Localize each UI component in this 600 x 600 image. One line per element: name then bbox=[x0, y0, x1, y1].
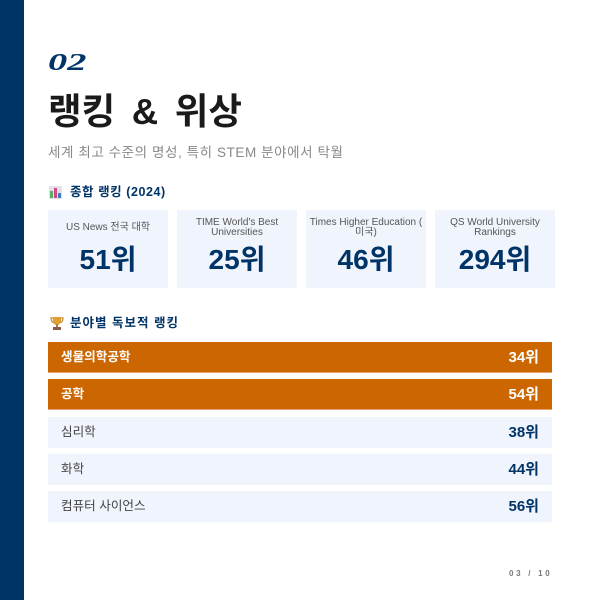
row label: 화학 bbox=[61, 462, 84, 476]
card label: QS World University bbox=[450, 216, 540, 228]
row label: 공학 bbox=[61, 387, 84, 401]
sidebar bbox=[0, 0, 24, 600]
card label bbox=[196, 216, 278, 238]
card: US News bbox=[48, 210, 168, 288]
row: computer science bbox=[48, 491, 552, 522]
row: psychology bbox=[48, 417, 552, 448]
heading: field rankings bbox=[50, 316, 179, 330]
card value: 294위 bbox=[459, 244, 531, 275]
row value: 54위 bbox=[508, 386, 539, 403]
icon: bar chart bbox=[49, 186, 62, 199]
heading: overall ranking bbox=[49, 185, 166, 199]
row value: 34위 bbox=[508, 349, 539, 366]
row label: 심리학 bbox=[61, 425, 96, 439]
card label: 미국) bbox=[355, 227, 377, 238]
card label: US News 전국 대학 bbox=[66, 222, 150, 233]
row: biomedical engineering bbox=[48, 342, 552, 373]
row: engineering bbox=[48, 379, 552, 410]
card label: TIME World's Best bbox=[196, 216, 278, 228]
row label: 컴퓨터 사이언스 bbox=[61, 499, 146, 513]
heading text: 분야별 독보적 랭킹 bbox=[70, 316, 179, 330]
row value: 56위 bbox=[508, 498, 539, 515]
card value: 46위 bbox=[338, 244, 394, 275]
card label: Times Higher Education ( bbox=[310, 216, 422, 228]
card value: 51위 bbox=[80, 244, 136, 275]
title: 랭킹 & 위상 bbox=[48, 90, 242, 132]
card: Times Higher Education bbox=[306, 210, 426, 288]
card: TIME bbox=[177, 210, 297, 288]
heading text: 종합 랭킹 (2024) bbox=[70, 185, 166, 199]
card value: 25위 bbox=[209, 244, 265, 275]
card label bbox=[450, 216, 540, 238]
row label: 생물의학공학 bbox=[61, 350, 131, 364]
subtitle: 세계 최고 수준의 명성, 특히 STEM 분야에서 탁월 bbox=[48, 144, 343, 160]
row value: 44위 bbox=[508, 461, 539, 478]
card label: Rankings bbox=[474, 227, 516, 238]
card label: Universities bbox=[211, 227, 263, 238]
card: QS bbox=[435, 210, 555, 288]
icon: trophy bbox=[50, 317, 64, 330]
row value: 38위 bbox=[508, 424, 539, 441]
page number: 03 / 10 bbox=[509, 569, 552, 578]
card label bbox=[310, 216, 422, 238]
row: chemistry bbox=[48, 454, 552, 485]
section number: 02 bbox=[48, 50, 86, 76]
